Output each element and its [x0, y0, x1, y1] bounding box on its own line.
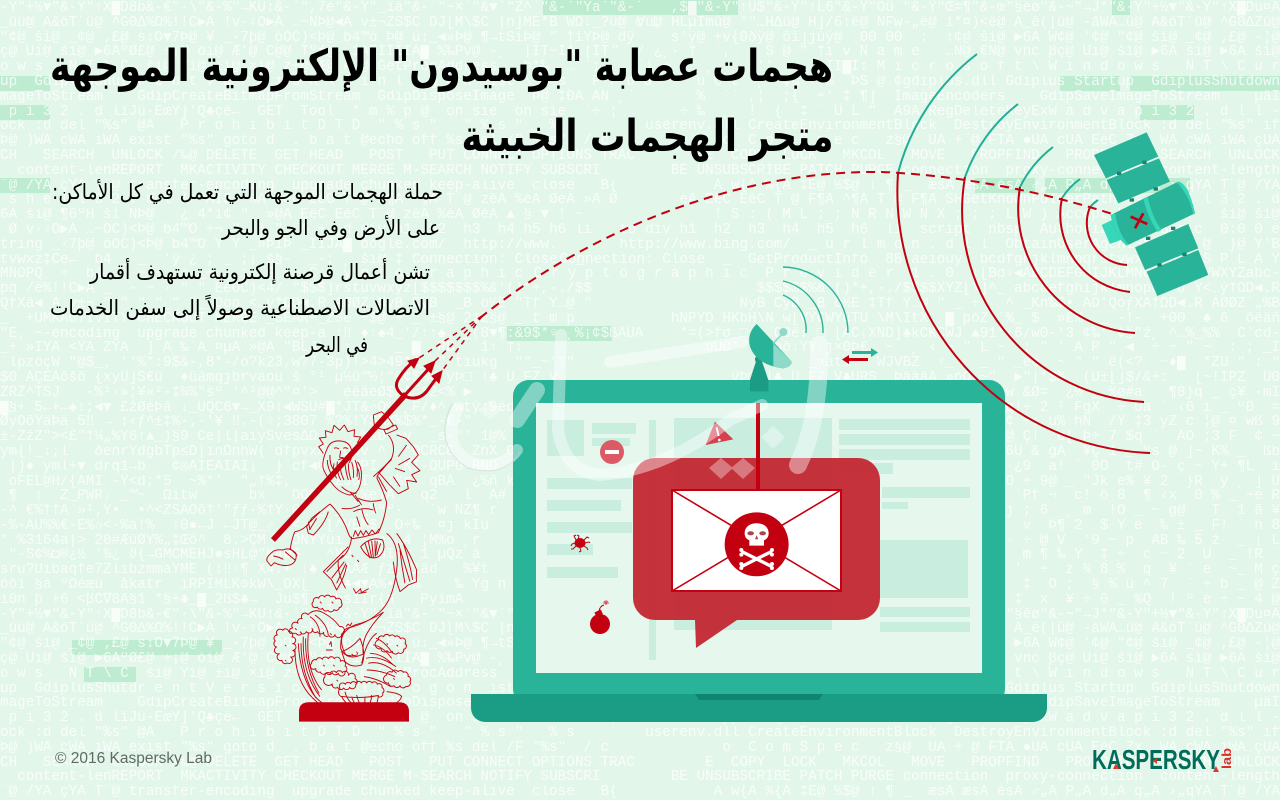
poseidon illustration [267, 358, 442, 722]
torso [330, 459, 392, 539]
laptop [471, 380, 1047, 722]
title: هجمات عصابة "بوسيدون" الإلكترونية الموجهة [50, 41, 833, 92]
copyright: © 2016 Kaspersky Lab [55, 750, 212, 767]
foam clumps [312, 595, 342, 612]
watermark calligraphy [445, 335, 819, 479]
body text: الاتصالات الاصطناعية وصولاً إلى سفن الخدمات [50, 294, 430, 321]
crown [319, 425, 361, 453]
satellite signal arcs [897, 54, 1150, 453]
signal arcs from dish [783, 267, 848, 333]
email speech bubble [633, 403, 880, 648]
body text [50, 179, 443, 357]
title [50, 41, 834, 162]
tail fin [341, 612, 383, 657]
body text: تشن أعمال قرصنة إلكترونية تستهدف أقمار [89, 258, 430, 285]
neptune line art [267, 412, 420, 722]
screen page blocks [547, 418, 970, 660]
body text: على الأرض وفي الجو والبحر [221, 215, 440, 240]
satellite [1094, 132, 1208, 296]
head and beard [323, 441, 361, 495]
trident [273, 358, 442, 540]
statue base [299, 702, 409, 722]
envelope [672, 490, 841, 591]
attack trajectory dashed line [419, 172, 1136, 371]
raised right arm with fin [373, 412, 420, 494]
left arm with fin [290, 504, 330, 550]
laptop base [471, 694, 1047, 722]
icon: satellite dish [749, 324, 792, 391]
icon: warning triangle [706, 422, 733, 445]
icon: bomb [590, 600, 610, 634]
skull icon [725, 512, 789, 576]
side fins [323, 547, 348, 590]
kaspersky logo: lab [1219, 748, 1234, 769]
laptop notch [695, 694, 823, 700]
laptop screen [536, 403, 982, 673]
title: متجر الهجمات الخبيثة [462, 111, 834, 162]
kaspersky logo: KASPERSKY [1092, 744, 1220, 775]
laptop body [513, 380, 1005, 705]
body text: في البحر [305, 333, 368, 357]
arrows: data exchange [842, 348, 878, 364]
connector line [756, 403, 760, 491]
icon: minus circle [600, 440, 624, 464]
icon: spider [571, 535, 590, 552]
body text: حملة الهجمات الموجهة التي تعمل في كل الأماكن: [52, 179, 443, 204]
